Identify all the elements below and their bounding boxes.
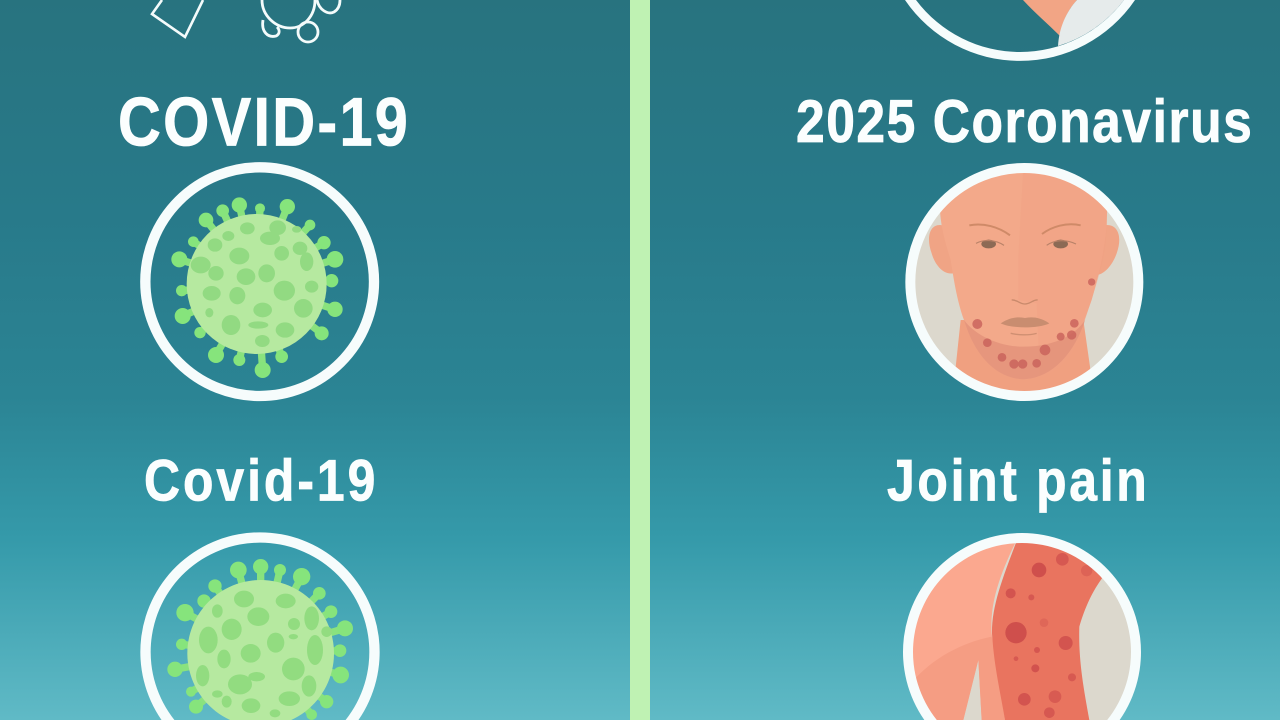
heading: COVID-19: COVID-19 <box>118 83 408 161</box>
icon: face with rash in white ring <box>910 167 1138 400</box>
icon: green virus in white ring, lower <box>140 532 380 720</box>
heading: Covid-19: Covid-19 <box>144 449 375 513</box>
mouth <box>1001 317 1049 327</box>
rash spots <box>972 278 1095 369</box>
heading: 2025 Coronavirus: 2025 Coronavirus <box>796 87 1252 155</box>
nose <box>1012 300 1038 304</box>
rash spots <box>1005 553 1092 718</box>
light skin limb <box>913 543 1015 720</box>
eyebrows <box>969 224 1081 235</box>
inflamed skin <box>992 537 1102 720</box>
heading: Joint pain: Joint pain <box>887 449 1147 513</box>
icon: cropped ring with shoulder, top right <box>905 0 1135 61</box>
icon: test strip outline <box>152 0 203 37</box>
icon: green virus in white ring <box>145 167 374 396</box>
ears <box>929 225 1119 275</box>
lower skin shade <box>916 637 1005 720</box>
centre divider <box>630 0 650 720</box>
eyes <box>981 240 1068 248</box>
right face shade <box>1084 274 1100 324</box>
neck <box>956 320 1090 391</box>
icon: virus outline <box>262 0 340 42</box>
jaw shading <box>964 320 1085 379</box>
head <box>940 173 1108 346</box>
icon: arm with rash in white ring <box>903 533 1141 720</box>
eyelid lines <box>976 241 1076 245</box>
